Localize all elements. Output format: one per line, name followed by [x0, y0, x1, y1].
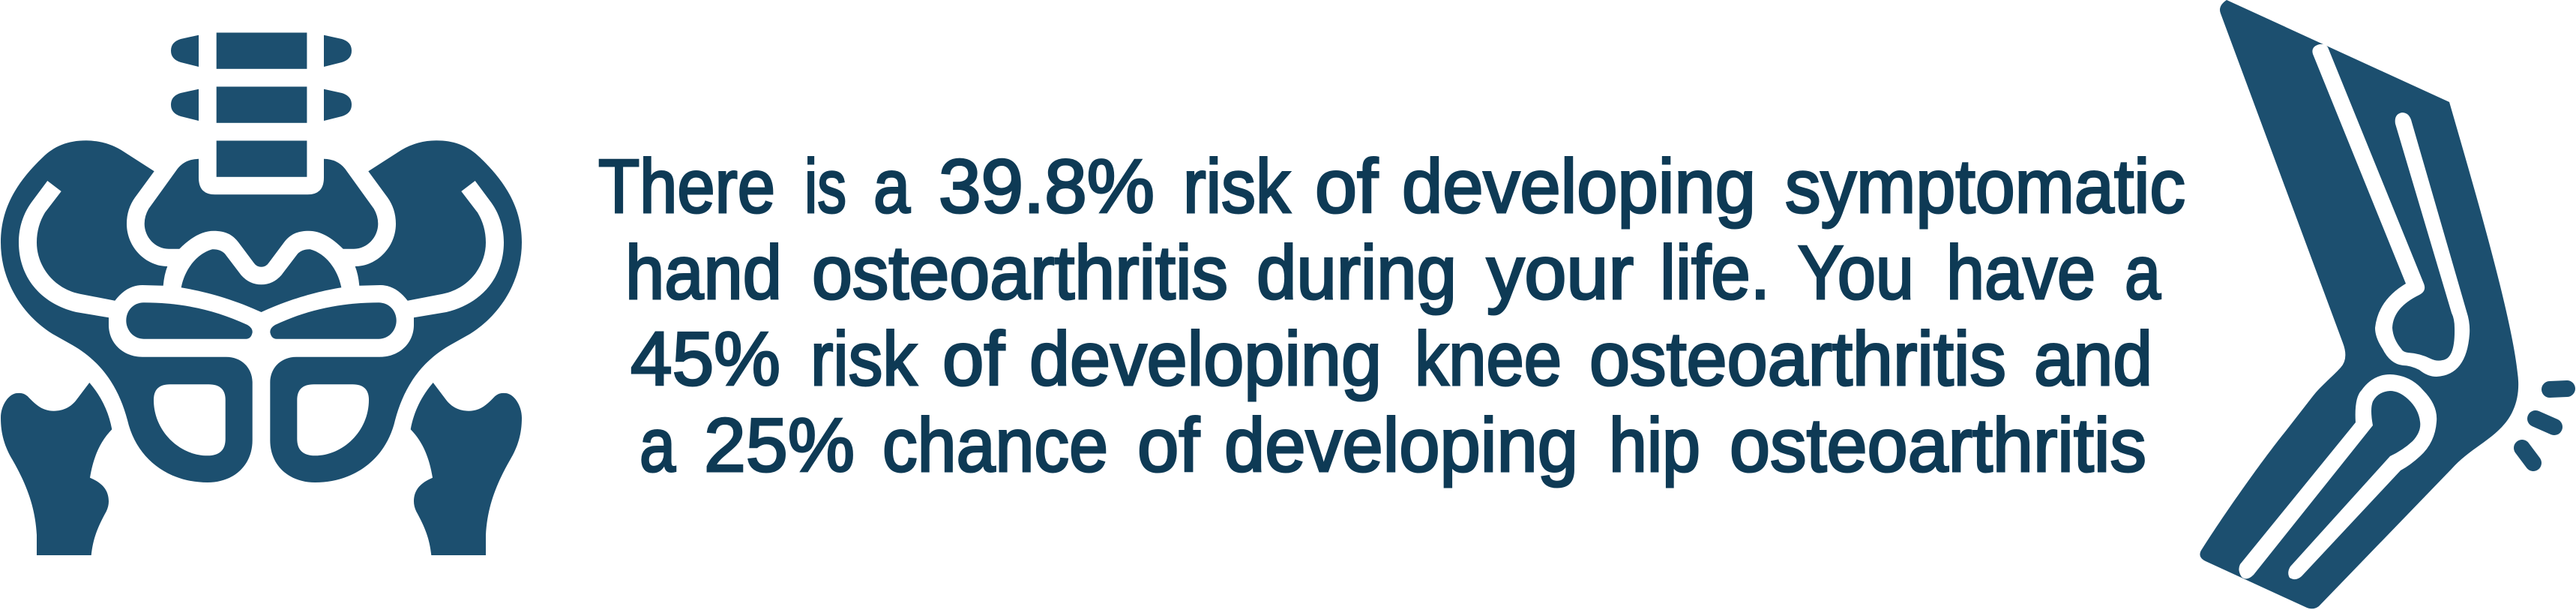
line 3: of: [942, 317, 1005, 401]
line 4: of: [1137, 404, 1200, 488]
line 2: during: [1257, 231, 1457, 315]
line 1: There: [598, 145, 775, 229]
line 4: chance: [882, 404, 1108, 488]
pain marks: [2522, 389, 2567, 463]
line 1: risk: [1183, 145, 1290, 229]
line 1: is: [804, 145, 846, 229]
leg silhouette: [2200, 0, 2518, 608]
line 3: osteoarthritis: [1589, 317, 2006, 401]
line 3: risk: [810, 317, 917, 401]
left hip bone: [1, 140, 253, 482]
line 3: and: [2034, 317, 2152, 401]
line 1: symptomatic: [1785, 145, 2185, 229]
icon: pelvis and spine: [1, 33, 522, 555]
text block: osteoarthritis risk statement: [598, 145, 2185, 488]
left femur: [1, 383, 112, 555]
tibia outline: [2239, 374, 2437, 579]
line 4: osteoarthritis: [1730, 404, 2146, 488]
line 2: life.: [1660, 231, 1770, 315]
line 1: [598, 145, 2185, 229]
line 3: 45%: [631, 317, 780, 401]
line 4: [640, 404, 2146, 488]
coccyx: [181, 249, 341, 312]
line 1: a: [873, 145, 911, 229]
femur outline: [2312, 44, 2470, 377]
line 2: have: [1946, 231, 2095, 315]
right hip bone: [270, 140, 522, 482]
line 1: of: [1315, 145, 1379, 229]
line 3: knee: [1415, 317, 1562, 401]
line 2: You: [1798, 231, 1914, 315]
line 2: a: [2125, 231, 2161, 315]
line 4: hip: [1609, 404, 1700, 488]
right femur: [411, 383, 522, 555]
line 3: [631, 317, 2152, 401]
line 3: developing: [1029, 317, 1382, 401]
line 2: osteoarthritis: [812, 231, 1228, 315]
line 2: hand: [625, 231, 782, 315]
sacrum: [145, 159, 378, 267]
line 2: your: [1487, 231, 1634, 315]
line 1: 39.8%: [939, 145, 1155, 229]
line 4: developing: [1224, 404, 1578, 488]
vertebrae: [171, 33, 352, 177]
line 4: 25%: [704, 404, 855, 488]
line 4: a: [640, 404, 676, 488]
line 2: [625, 231, 2161, 315]
icon: knee joint with pain marks: [2200, 0, 2567, 608]
line 1: developing: [1402, 145, 1756, 229]
